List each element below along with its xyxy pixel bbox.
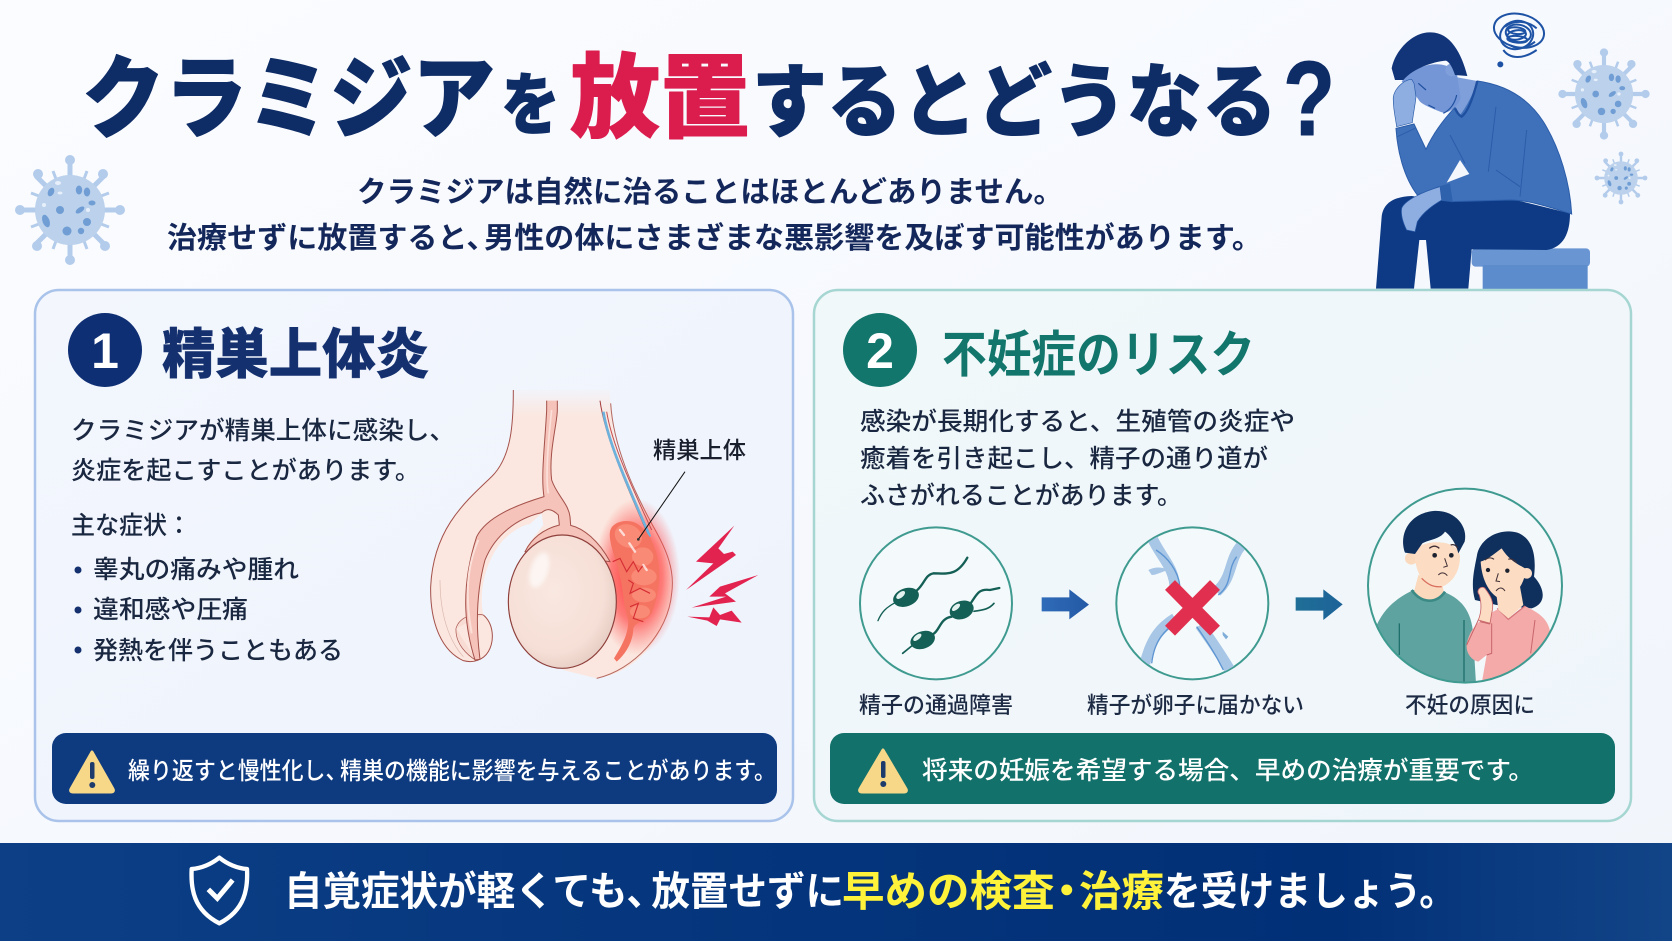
- body text: 癒着を引き起こし、精子の通り道が: [860, 445, 1268, 473]
- icon: warning: [860, 750, 906, 792]
- body text: 感染が長期化すると、生殖管の炎症や: [860, 408, 1295, 436]
- title: [82, 40, 1335, 158]
- icon: warning: [71, 752, 113, 792]
- circle: sperm: [860, 527, 1012, 679]
- body text: クラミジアが精巣上体に感染し、: [71, 417, 455, 445]
- intro text: 治療せずに放置すると、男性の体にさまざまな悪影響を及ぼす可能性があります。: [167, 221, 1262, 255]
- heading: epididymitis: 精巣上体炎: [162, 325, 429, 385]
- heading: infertility risk: 不妊症のリスク: [942, 327, 1255, 383]
- number badge 2: 2: [866, 323, 894, 379]
- epididymis: [610, 520, 659, 662]
- arrow: [1042, 589, 1089, 619]
- alert bar: 将来の妊娠を希望する場合、早めの治療が重要です。: [922, 757, 1534, 785]
- number badge 2: [843, 313, 917, 387]
- symptoms list: 主な症状：: [71, 512, 191, 540]
- red cross: [1170, 585, 1215, 631]
- arrow and couple: [1296, 488, 1562, 683]
- body text: [860, 408, 1295, 510]
- title: 放置: [570, 48, 750, 150]
- number badge 1: [68, 313, 142, 387]
- illustration: worried man on a stool: [1376, 9, 1590, 289]
- body text: [71, 417, 455, 485]
- body text: ふさがれることがあります。: [860, 482, 1182, 510]
- footer message: 早めの検査・治療: [842, 868, 1164, 915]
- symptoms list: 違和感や圧痛: [93, 596, 248, 624]
- icon: virus right large: [1558, 48, 1650, 140]
- diagram: sperm and blocked duct: [860, 527, 1268, 679]
- number badge 1: 1: [91, 323, 119, 379]
- labels: [859, 693, 1535, 718]
- panel: infertility risk: [814, 290, 1631, 821]
- label: epididymis: 精巣上体: [653, 437, 746, 463]
- panel: epididymitis: [35, 290, 793, 821]
- title: ?: [1283, 40, 1335, 158]
- intro text: クラミジアは自然に治ることはほとんどありません。: [357, 176, 1063, 209]
- circle: blocked duct: [1116, 527, 1268, 679]
- symptoms list: [71, 512, 343, 665]
- footer message: [284, 868, 1456, 915]
- alert bar: [52, 733, 777, 804]
- intro text: [167, 176, 1262, 255]
- symptoms list: 睾丸の痛みや腫れ: [93, 556, 299, 584]
- icon: virus right small: [1595, 152, 1647, 204]
- alert bar: 繰り返すと慢性化し、精巣の機能に影響を与えることがあります。: [128, 758, 776, 785]
- body text: 炎症を起こすことがあります。: [71, 457, 420, 485]
- bolts: [686, 526, 758, 626]
- labels: 不妊の原因に: [1405, 693, 1535, 718]
- labels: 精子の通過障害: [859, 693, 1013, 718]
- footer message: を受けましょう。: [1164, 870, 1456, 914]
- circle: worried couple: [1368, 488, 1562, 683]
- icon: virus left: [15, 155, 125, 265]
- title: を: [501, 68, 560, 144]
- icon: thought scribble: [1491, 9, 1547, 67]
- labels: 精子が卵子に届かない: [1087, 693, 1304, 718]
- footer message: 自覚症状が軽くても、放置せずに: [284, 870, 844, 914]
- symptoms list: 発熱を伴うこともある: [93, 637, 343, 665]
- icon: shield: [191, 858, 247, 923]
- title: するとどうなる: [752, 58, 1277, 147]
- title: クラミジア: [82, 50, 495, 150]
- illustration: anatomy: [431, 390, 758, 678]
- alert bar: [830, 733, 1615, 804]
- footer banner: [0, 843, 1672, 941]
